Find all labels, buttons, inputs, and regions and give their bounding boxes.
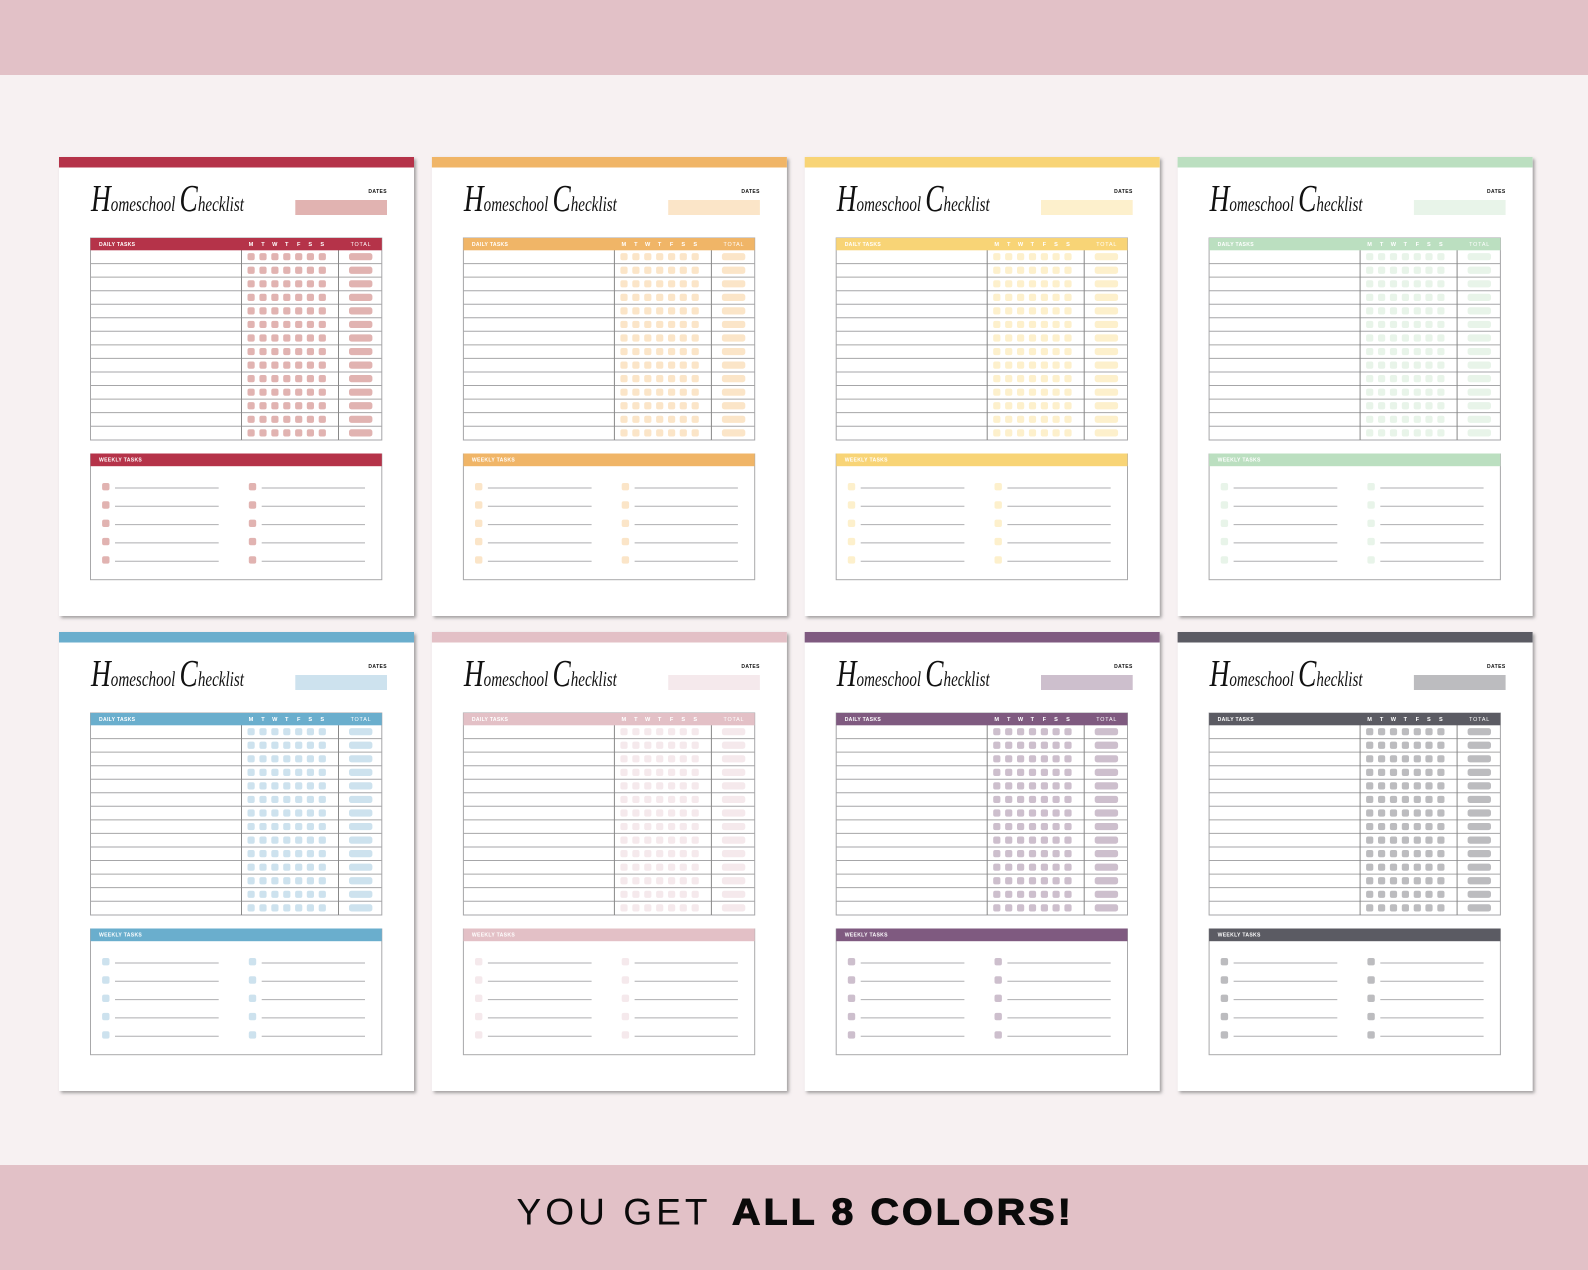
weekly header — [836, 454, 1128, 466]
header labels: MTWTFSS — [994, 717, 1070, 723]
header labels — [1218, 242, 1490, 248]
header labels: MTWTFSS — [249, 242, 324, 248]
header labels: MTWTFSS — [622, 717, 697, 723]
planner page: orange — [432, 157, 787, 616]
weekly tasks box — [463, 454, 755, 580]
header labels: TOTAL — [723, 717, 744, 723]
page title: hecklist — [198, 193, 244, 216]
page title: C — [180, 178, 199, 220]
checkbox rows — [620, 253, 745, 436]
checkbox rows — [1366, 728, 1491, 911]
planner page: purple — [805, 632, 1160, 1091]
weekly label: WEEKLY TASKS — [1218, 458, 1261, 464]
colour bar — [59, 157, 414, 168]
header labels — [1218, 717, 1490, 723]
checkbox rows — [993, 253, 1118, 436]
header labels: TOTAL — [351, 242, 371, 248]
dates label: DATES — [1487, 189, 1506, 195]
caption: you get all 8 colors — [516, 1192, 1074, 1232]
checkbox rows — [248, 253, 372, 436]
weekly tasks box — [90, 928, 382, 1055]
dates field — [668, 200, 760, 215]
header labels: MTWTFSS — [1367, 242, 1443, 248]
page title: C — [552, 653, 571, 695]
planner page: blue — [59, 632, 414, 1091]
weekly header — [1209, 928, 1500, 941]
header labels: TOTAL — [351, 717, 371, 723]
page title: C — [180, 653, 199, 695]
weekly checkboxes — [475, 958, 629, 1039]
dates label: DATES — [1114, 664, 1133, 670]
dates label: DATES — [1114, 189, 1133, 195]
colour bar — [432, 632, 787, 642]
header labels: DAILY TASKS — [472, 717, 509, 723]
table header — [90, 713, 382, 725]
header labels: MTWTFSS — [249, 717, 324, 723]
checkbox rows — [248, 728, 372, 911]
page title: hecklist — [1316, 668, 1363, 691]
page sheet — [432, 157, 787, 616]
header labels: MTWTFSS — [622, 242, 697, 248]
daily tasks table — [463, 238, 755, 440]
weekly label: WEEKLY TASKS — [845, 933, 888, 939]
daily tasks table — [836, 713, 1128, 915]
page title: C — [925, 178, 944, 220]
weekly label: WEEKLY TASKS — [472, 933, 515, 939]
weekly label: WEEKLY TASKS — [1218, 933, 1261, 939]
page title: Homeschool — [837, 178, 921, 220]
weekly label: WEEKLY TASKS — [99, 933, 142, 939]
weekly tasks box — [836, 928, 1128, 1055]
page title: hecklist — [571, 193, 617, 216]
dates field — [295, 675, 387, 690]
table header — [463, 713, 755, 725]
weekly header — [1209, 454, 1500, 466]
header labels: DAILY TASKS — [1218, 242, 1254, 248]
page title: Homeschool — [464, 178, 548, 220]
page title: hecklist — [944, 668, 990, 691]
page title: Homeschool — [91, 178, 175, 220]
daily tasks table — [1209, 713, 1500, 915]
dates field — [295, 200, 387, 215]
checkbox rows — [1366, 253, 1491, 436]
weekly tasks box — [1209, 454, 1500, 580]
colour bar — [805, 632, 1160, 642]
planner page: pink — [432, 632, 787, 1091]
weekly tasks box — [90, 454, 382, 580]
header labels: DAILY TASKS — [99, 717, 136, 723]
weekly header — [463, 928, 755, 941]
weekly label: WEEKLY TASKS — [845, 458, 888, 464]
dates field — [1041, 675, 1133, 690]
header labels: DAILY TASKS — [472, 242, 509, 248]
page sheet — [805, 632, 1160, 1091]
checkbox rows — [993, 728, 1118, 911]
bottom band — [0, 1165, 1588, 1270]
page title: hecklist — [1316, 193, 1363, 216]
header labels: DAILY TASKS — [99, 242, 136, 248]
weekly label: WEEKLY TASKS — [99, 458, 142, 464]
header labels — [99, 242, 371, 248]
daily tasks table — [90, 238, 382, 440]
weekly header — [90, 928, 382, 941]
weekly label: WEEKLY TASKS — [472, 458, 515, 464]
weekly tasks box — [836, 454, 1128, 580]
page title: Homeschool — [1210, 653, 1294, 695]
page title: Homeschool — [837, 653, 921, 695]
daily tasks table — [836, 238, 1128, 440]
table header — [1209, 713, 1500, 725]
page title: C — [552, 178, 571, 220]
weekly checkboxes — [102, 958, 256, 1039]
header labels — [845, 717, 1117, 723]
page title: Homeschool — [1210, 178, 1294, 220]
weekly header — [836, 928, 1128, 941]
table header — [463, 238, 755, 250]
page title: C — [1298, 178, 1317, 220]
page sheet — [805, 157, 1160, 616]
checkbox rows — [620, 728, 745, 911]
planner page: green — [1178, 157, 1533, 616]
dates field — [1414, 200, 1506, 215]
header labels: MTWTFSS — [1367, 717, 1443, 723]
planner page: gray — [1178, 632, 1533, 1091]
colour bar — [432, 157, 787, 168]
dates label: DATES — [741, 664, 760, 670]
header labels — [472, 717, 744, 723]
header labels: DAILY TASKS — [845, 717, 881, 723]
page sheet — [59, 157, 414, 616]
header labels: DAILY TASKS — [1218, 717, 1254, 723]
daily tasks table — [90, 713, 382, 915]
weekly checkboxes — [848, 958, 1002, 1039]
table header — [90, 238, 382, 250]
colour bar — [1178, 632, 1533, 642]
dates field — [1041, 200, 1133, 215]
daily tasks table — [1209, 238, 1500, 440]
dates label: DATES — [1487, 664, 1506, 670]
weekly tasks box — [463, 928, 755, 1055]
colour bar — [59, 632, 414, 642]
page title: Homeschool — [464, 653, 548, 695]
weekly header — [90, 454, 382, 466]
caption: you get all 8 colors: ALL 8 COLORS! — [732, 1192, 1074, 1232]
header labels — [472, 242, 744, 248]
header labels: DAILY TASKS — [845, 242, 881, 248]
header labels: MTWTFSS — [994, 242, 1070, 248]
page sheet — [59, 632, 414, 1091]
page title: Homeschool — [91, 653, 175, 695]
dates label: DATES — [368, 189, 387, 195]
header labels: TOTAL — [1469, 717, 1490, 723]
page title: C — [1298, 653, 1317, 695]
header labels: TOTAL — [1096, 717, 1117, 723]
header labels: TOTAL — [1469, 242, 1490, 248]
top band — [0, 0, 1588, 75]
header labels: TOTAL — [1096, 242, 1117, 248]
table header — [836, 238, 1128, 250]
header labels — [99, 717, 371, 723]
page title: hecklist — [571, 668, 617, 691]
page sheet — [1178, 157, 1533, 616]
page sheet — [432, 632, 787, 1091]
header labels — [845, 242, 1117, 248]
weekly tasks box — [1209, 928, 1500, 1055]
caption: you get all 8 colors: YOU GET — [516, 1192, 712, 1232]
planner page: red — [59, 157, 414, 616]
weekly checkboxes — [102, 483, 256, 564]
table header — [1209, 238, 1500, 250]
header labels: TOTAL — [723, 242, 744, 248]
weekly header — [463, 454, 755, 466]
colour bar — [1178, 157, 1533, 168]
page title: C — [925, 653, 944, 695]
dates field — [1414, 675, 1506, 690]
dates field — [668, 675, 760, 690]
colour bar — [805, 157, 1160, 168]
dates label: DATES — [368, 664, 387, 670]
weekly checkboxes — [1221, 483, 1375, 564]
daily tasks table — [463, 713, 755, 915]
dates label: DATES — [741, 189, 760, 195]
table header — [836, 713, 1128, 725]
weekly checkboxes — [1221, 958, 1375, 1039]
weekly checkboxes — [848, 483, 1002, 564]
planner page: yellow — [805, 157, 1160, 616]
weekly checkboxes — [475, 483, 629, 564]
page title: hecklist — [198, 668, 244, 691]
page title: hecklist — [944, 193, 990, 216]
page sheet — [1178, 632, 1533, 1091]
